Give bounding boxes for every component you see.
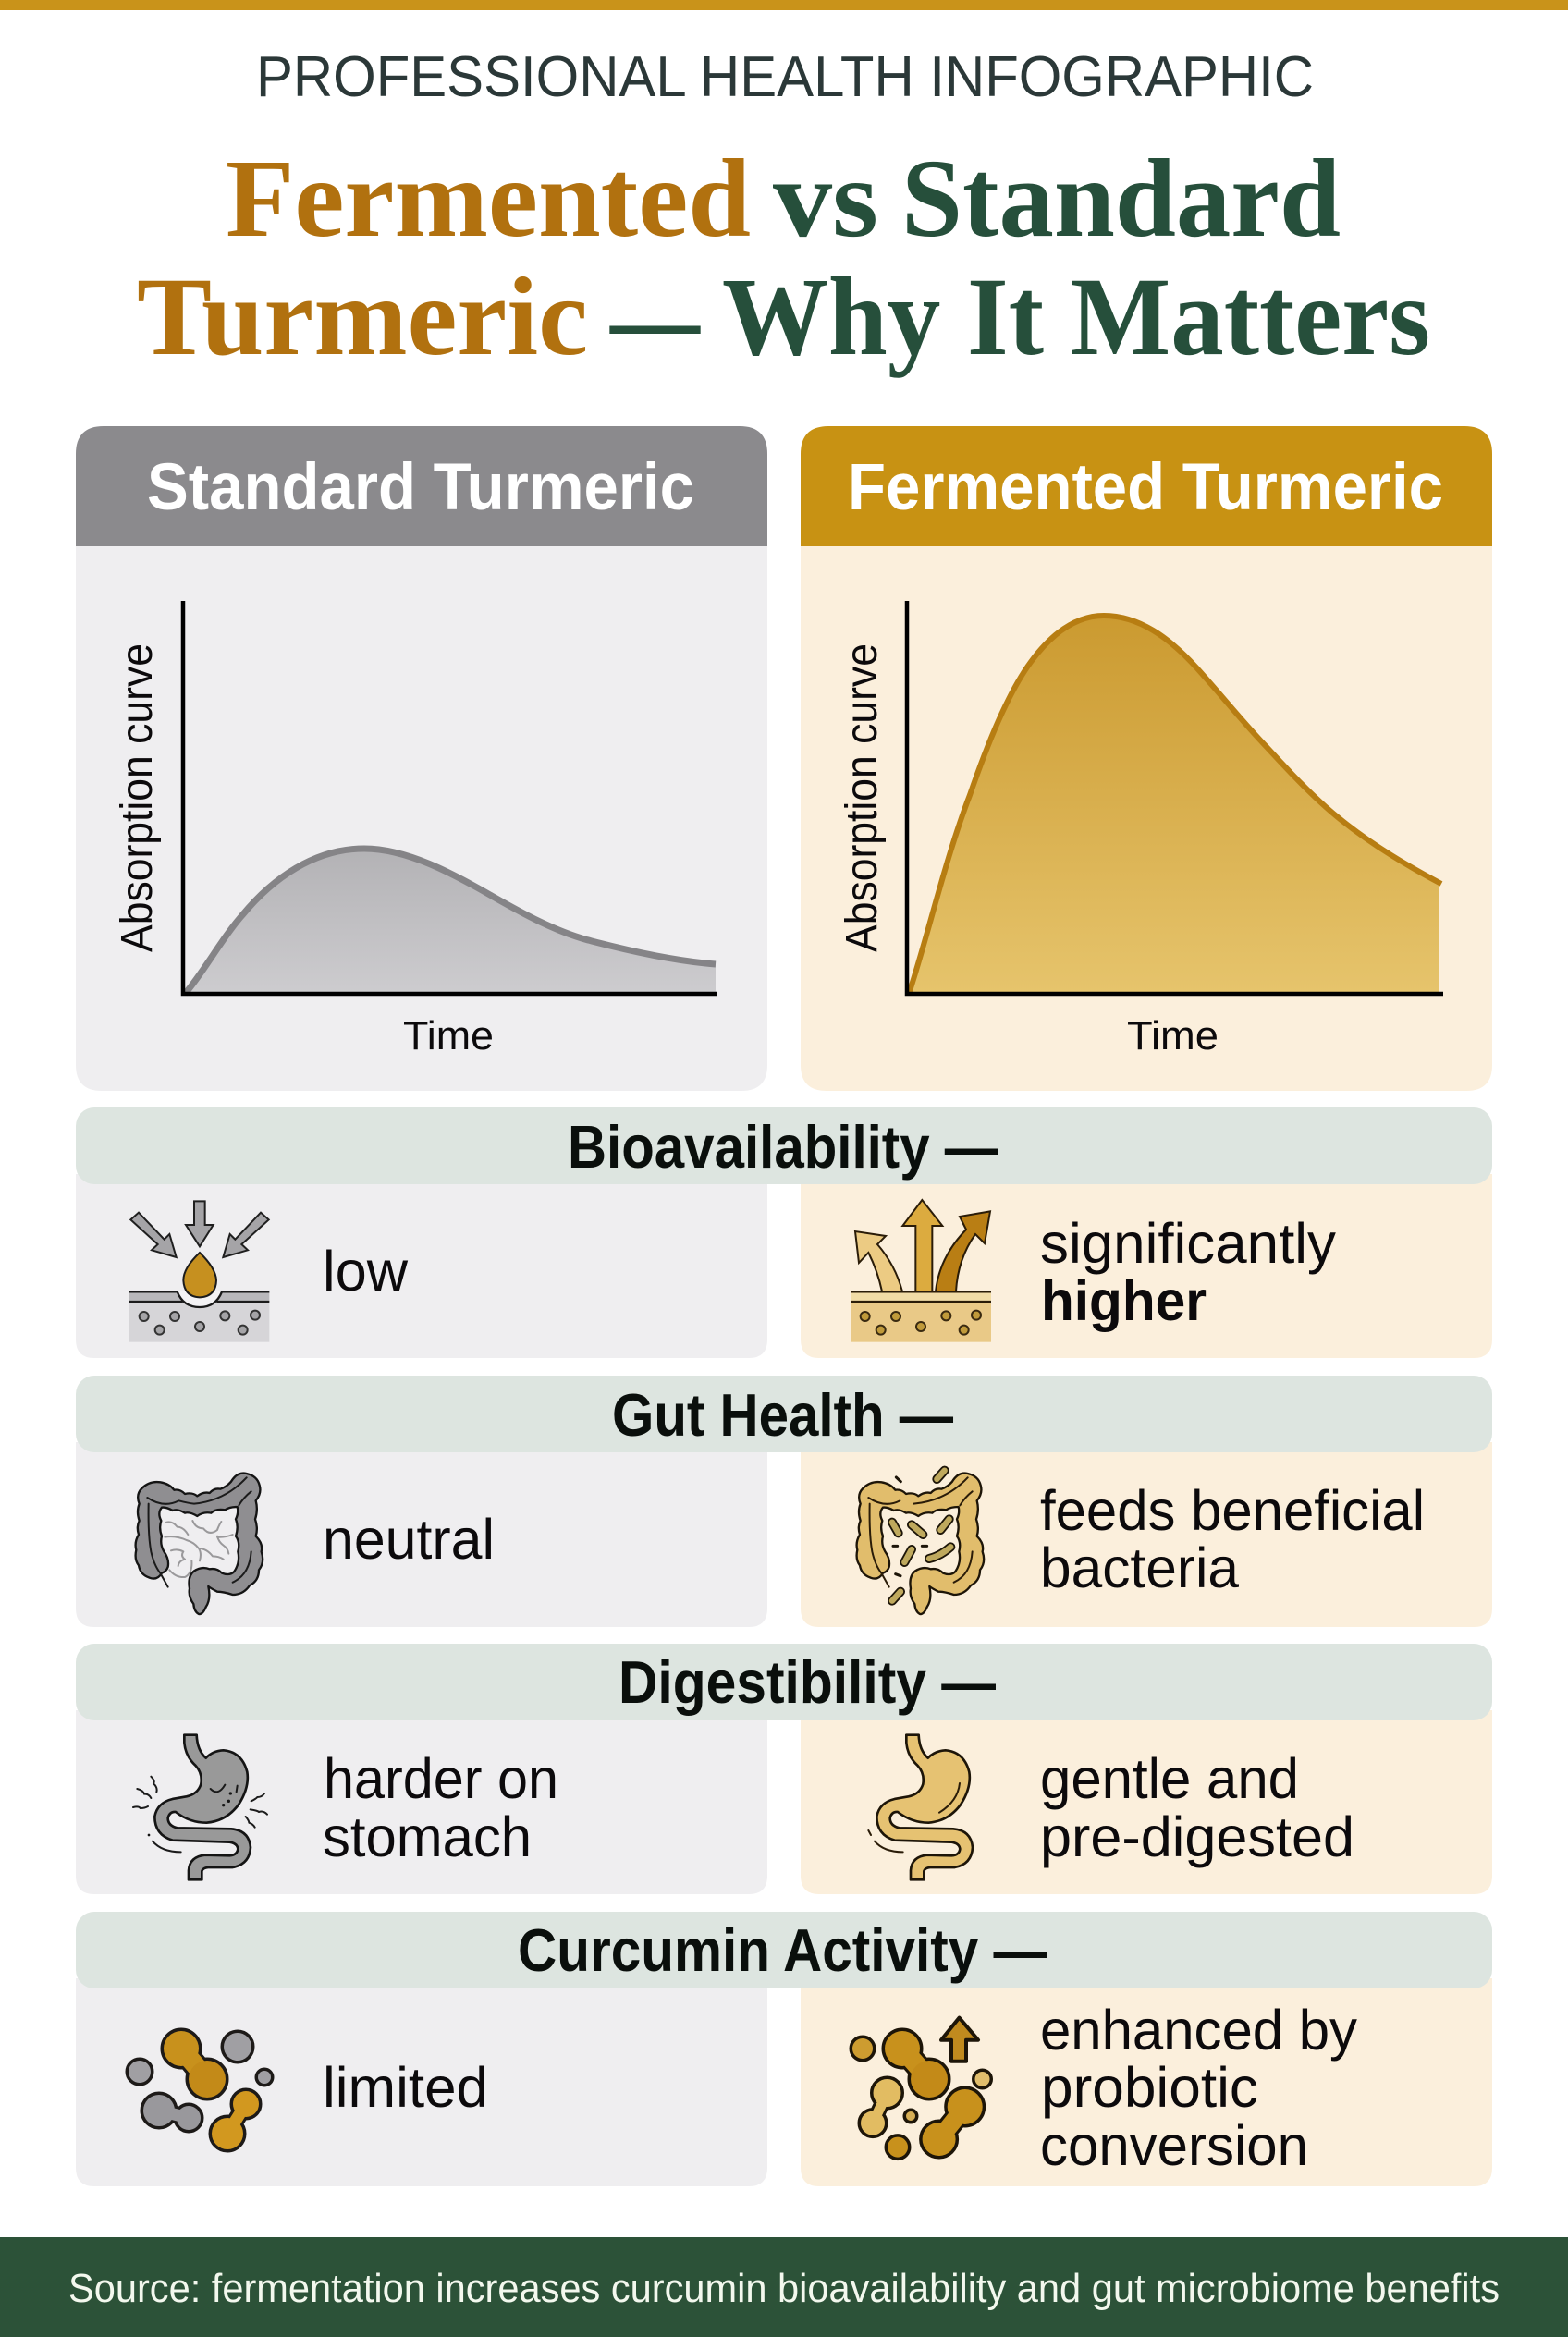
title: — <box>609 257 701 381</box>
footer band <box>0 2237 1568 2337</box>
row header band <box>76 1376 1492 1452</box>
fermented cell background <box>801 1978 1492 2186</box>
row: gut health <box>76 1376 1492 1627</box>
icon: gentle stomach <box>868 1735 973 1879</box>
title: Turmeric <box>137 255 588 379</box>
icon: low absorption <box>129 1201 269 1342</box>
title: Why It Matters <box>722 255 1430 379</box>
source line: Source: fermentation increases curcumin bioavailability and gut microbiome benefits <box>68 2266 1500 2311</box>
value: enhanced by probiotic conversion: probiotic <box>1041 2056 1258 2119</box>
row heading: Digestibility — <box>619 1648 996 1716</box>
heading: standard turmeric: Standard Turmeric <box>147 451 694 524</box>
row heading: Bioavailability — <box>568 1113 998 1181</box>
icon: irritated stomach <box>133 1735 267 1879</box>
value: limited: limited <box>323 2056 488 2119</box>
row header band <box>76 1912 1492 1988</box>
value: feeds beneficial bacteria: bacteria <box>1040 1536 1239 1599</box>
standard cell background <box>76 1442 767 1627</box>
row: digestibility <box>76 1644 1492 1894</box>
row: curcumin activity <box>76 1912 1492 2186</box>
chart: fermented absorption curve: Absorption curve <box>838 643 887 952</box>
fermented cell background <box>801 1442 1492 1627</box>
eyebrow: professional health infographic: PROFESSIONAL HEALTH INFOGRAPHIC <box>256 45 1314 109</box>
fermented cell background <box>801 1174 1492 1358</box>
standard cell background <box>76 1174 767 1358</box>
value: significantly higher: significantly <box>1040 1212 1337 1275</box>
value: harder on stomach <box>323 1747 558 1868</box>
title: Fermented <box>226 137 751 261</box>
chart: standard absorption curve: Absorption curve <box>113 643 162 952</box>
value: harder on stomach: stomach <box>323 1805 532 1868</box>
row heading: Gut Health — <box>612 1381 953 1449</box>
value: harder on stomach: harder on <box>324 1747 558 1810</box>
icon: gut with bacteria <box>857 1471 984 1614</box>
value: significantly higher: higher <box>1041 1269 1207 1332</box>
value: enhanced by probiotic conversion: conversion <box>1040 2114 1308 2177</box>
value: gentle and pre-digested: pre-digested <box>1040 1805 1354 1868</box>
value: significantly higher <box>1040 1212 1337 1332</box>
title: vs <box>773 137 878 261</box>
value: feeds beneficial bacteria: feeds beneficial <box>1040 1479 1425 1542</box>
row header band <box>76 1107 1492 1184</box>
panel: fermented turmeric chart <box>801 426 1492 1091</box>
value: enhanced by probiotic conversion: enhanced by <box>1040 1999 1357 2062</box>
chart: standard absorption curve: Time <box>403 1013 494 1058</box>
chart: fermented absorption curve: Time <box>1127 1013 1219 1058</box>
panel: standard turmeric chart <box>76 426 767 1091</box>
title: Standard <box>901 137 1341 261</box>
value: gentle and pre-digested: gentle and <box>1040 1747 1299 1810</box>
value: enhanced by probiotic conversion <box>1040 1999 1357 2177</box>
chart: standard absorption curve <box>113 601 717 1058</box>
value: gentle and pre-digested <box>1040 1747 1354 1868</box>
row heading: Curcumin Activity — <box>518 1916 1047 1984</box>
value: neutral: neutral <box>323 1508 495 1571</box>
heading: fermented turmeric: Fermented Turmeric <box>848 451 1443 524</box>
icon: neutral gut <box>136 1474 263 1614</box>
top accent bar <box>0 0 1568 10</box>
icon: enhanced curcumin molecules <box>852 2018 989 2158</box>
row: bioavailability <box>76 1107 1492 1358</box>
standard cell background <box>76 1978 767 2186</box>
chart: fermented absorption curve <box>838 601 1443 1058</box>
standard cell background <box>76 1710 767 1894</box>
icon: higher absorption <box>851 1200 991 1342</box>
title <box>137 137 1430 381</box>
fermented cell background <box>801 1710 1492 1894</box>
value: low: low <box>323 1240 409 1303</box>
icon: limited curcumin molecules <box>129 2031 271 2149</box>
row header band <box>76 1644 1492 1720</box>
value: feeds beneficial bacteria <box>1040 1479 1425 1599</box>
